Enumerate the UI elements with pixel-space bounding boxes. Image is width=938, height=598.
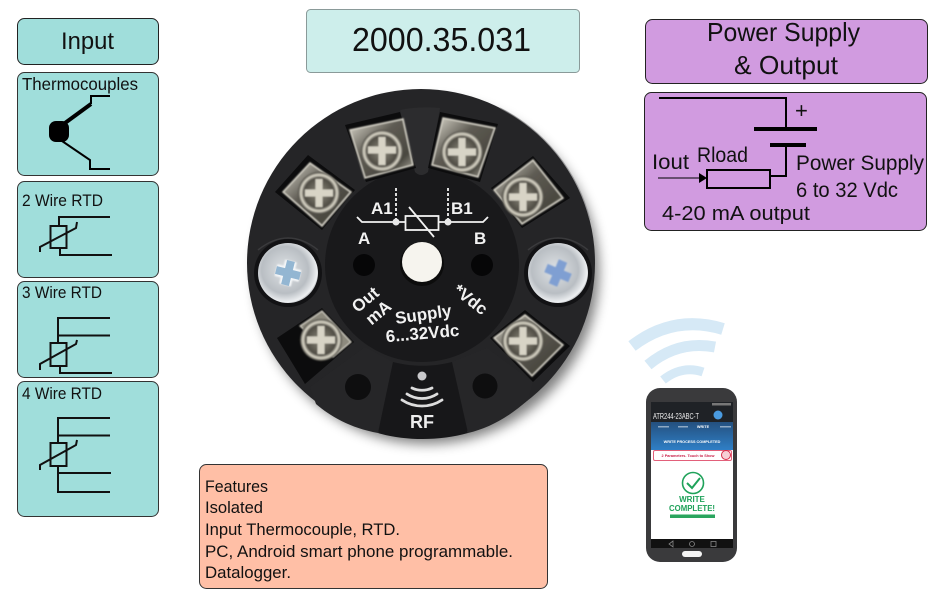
lower pads xyxy=(310,347,533,439)
panel: input heading: Input xyxy=(61,28,114,55)
phone screen: WRITE PROCESS COMPLETED xyxy=(664,440,721,444)
icon: RF wireless symbol xyxy=(402,372,442,432)
schematic: sensor symbol printed on device xyxy=(357,188,488,237)
label: power supply: Power Supply xyxy=(796,152,924,175)
panel: power supply heading: Power Supply xyxy=(707,17,860,47)
smartphone xyxy=(646,388,737,562)
phone screen: ATR244-23ABC-T xyxy=(653,411,699,421)
panel: 4 wire RTD xyxy=(18,382,158,516)
arrow: output current xyxy=(699,173,707,183)
terminal: top right xyxy=(428,112,498,182)
panel: thermocouples xyxy=(18,72,158,176)
label: thermocouples: Thermocouples xyxy=(22,74,138,94)
panel: power supply wiring diagram xyxy=(644,92,926,230)
phone screen: 2 Parameters. Touch to Show xyxy=(662,454,714,458)
terminal: lower right xyxy=(490,310,570,382)
device labels: B1 xyxy=(451,199,473,218)
panel: 2 wire RTD xyxy=(18,182,158,278)
device labels: mA xyxy=(362,297,395,329)
icon: wifi signal arcs xyxy=(632,324,723,380)
device labels: Supply xyxy=(394,301,453,328)
icon: 2 wire RTD symbol xyxy=(40,217,112,255)
device labels xyxy=(348,199,491,346)
top ridge xyxy=(400,107,440,175)
panel: features: Input Thermocouple, RTD. xyxy=(205,520,400,539)
device labels: A xyxy=(358,229,370,248)
centre hole xyxy=(400,242,444,286)
label: plus sign: + xyxy=(795,98,808,123)
icon: thermocouple symbol xyxy=(49,96,110,169)
label: voltage range: 6 to 32 Vdc xyxy=(796,179,898,202)
device body xyxy=(247,89,595,437)
icon: RF wireless symbol: RF xyxy=(410,412,434,432)
panel: features xyxy=(200,464,548,588)
phone screen: COMPLETE! xyxy=(669,504,715,513)
terminal: upper right xyxy=(491,156,570,228)
panel: features: Isolated xyxy=(205,498,263,517)
wiring: battery and load circuit xyxy=(658,98,817,188)
panel: 3 wire RTD xyxy=(18,282,158,378)
terminal: lower left xyxy=(277,308,354,384)
label: output range: 4-20 mA output xyxy=(662,203,810,225)
label: 2 wire RTD: 2 Wire RTD xyxy=(22,191,103,210)
panel: power supply heading: & Output xyxy=(734,50,839,80)
label: 4 wire RTD: 4 Wire RTD xyxy=(22,384,102,403)
big screw: right xyxy=(524,238,592,307)
title xyxy=(306,10,580,72)
title: 2000.35.031 xyxy=(352,21,531,58)
label: Iout: Iout xyxy=(652,151,689,174)
terminal: upper left xyxy=(275,155,355,230)
device labels: Out xyxy=(348,283,383,316)
panel: features: Features xyxy=(205,477,268,496)
panel: power supply heading xyxy=(646,17,928,84)
icon: 4 wire RTD symbol xyxy=(40,418,111,492)
phone screen: WRITE xyxy=(697,425,710,429)
label: 3 wire RTD: 3 Wire RTD xyxy=(22,283,102,302)
phone screen xyxy=(651,402,733,548)
label: Rload: Rload xyxy=(697,144,748,167)
phone screen: WRITE xyxy=(679,495,706,504)
device labels: 6...32Vdc xyxy=(385,321,460,346)
panel: input heading xyxy=(18,18,158,64)
device labels: *Vdc xyxy=(450,281,491,319)
side holes xyxy=(353,254,493,276)
panel: features: Datalogger. xyxy=(205,563,291,582)
home button xyxy=(682,551,702,557)
panel: features: PC, Android smart phone programmable. xyxy=(205,542,513,561)
device: round transmitter head xyxy=(247,89,599,444)
big screw: left xyxy=(254,238,322,307)
device labels: A1 xyxy=(371,199,393,218)
icon: 3 wire RTD symbol xyxy=(40,318,112,373)
device labels: B xyxy=(474,229,486,248)
terminal: top left xyxy=(345,112,416,182)
device shadow xyxy=(255,100,599,444)
